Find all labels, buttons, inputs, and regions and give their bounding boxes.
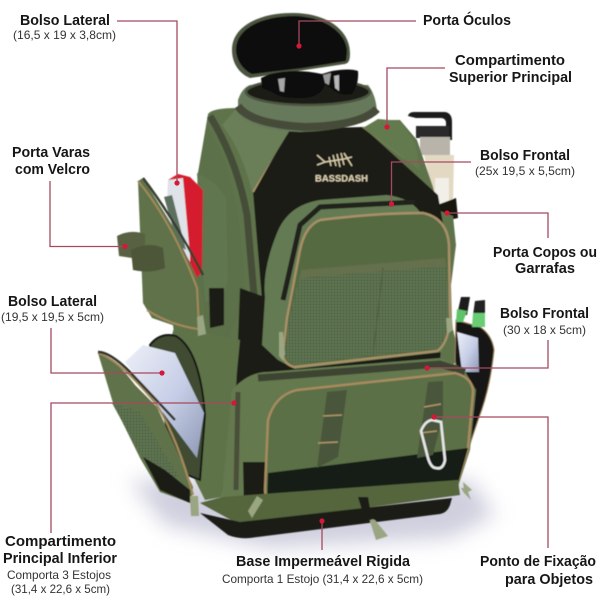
icon: bottle in side holder — [408, 112, 454, 210]
lower pocket piped face — [265, 373, 473, 510]
side shading — [172, 125, 246, 490]
icon: sunglasses case lid — [232, 13, 350, 78]
label: Base Impermeável Rigida: Comporta 1 Estojo (31,4 x 22,6 x 5cm) — [222, 572, 423, 586]
black lower corner — [243, 462, 265, 510]
black gap beneath side pocket — [209, 288, 224, 328]
callout: side pocket lower — [51, 328, 165, 376]
callout: attachment point — [431, 414, 548, 548]
hard black base — [200, 498, 452, 538]
label: Porta Copos — [493, 244, 597, 277]
lower side panel — [173, 325, 240, 500]
label: Ponto de Fixação — [480, 553, 596, 588]
icon: cup holder strap — [437, 198, 458, 222]
icon: rod holder — [117, 232, 165, 272]
callout: front pocket top — [389, 162, 471, 207]
lower pocket outer — [222, 358, 476, 515]
tan piping on centre panel — [253, 127, 405, 192]
flap piping — [138, 181, 199, 329]
label: Base Impermeável Rigida: Base Impermeável Rigida — [236, 553, 411, 570]
label: Bolso Lateral lower — [1, 293, 104, 324]
lower black gap — [236, 288, 282, 392]
ground shadow — [130, 480, 495, 548]
upper pocket piped face — [283, 213, 450, 367]
main body — [172, 108, 460, 495]
upper side pocket body — [197, 173, 228, 302]
upper pocket zipper shadow — [283, 202, 415, 300]
side zipper — [210, 116, 254, 295]
black band — [267, 448, 468, 510]
base green band — [200, 480, 460, 525]
lower flap black base — [143, 457, 190, 503]
upper left flap — [138, 178, 206, 331]
icon: zipper cords — [358, 497, 372, 520]
callout: main lower compartment — [51, 400, 237, 533]
callout: bottle holder — [444, 210, 548, 238]
callout: glasses holder — [296, 21, 416, 49]
label: Porta Varas: com Velcro — [15, 161, 90, 178]
label: Porta Óculos: Porta Óculos — [423, 11, 511, 29]
straps — [317, 381, 443, 468]
label: Bolso Frontal top: Bolso Frontal — [480, 147, 570, 164]
icon: carabiner — [421, 420, 445, 468]
label: Porta Copos: Garrafas — [515, 260, 575, 277]
icon: sunglasses — [261, 70, 358, 98]
logo: BASSDASH — [315, 174, 368, 184]
collar zipper — [238, 106, 377, 127]
backpack illustration — [98, 13, 494, 540]
label: Bolso Lateral lower: (19,5 x 19,5 x 5cm) — [1, 310, 104, 324]
collar opening — [246, 79, 370, 105]
label: Compartimento Superior Principal: Compartimento — [455, 52, 565, 69]
logo — [315, 153, 368, 184]
callout: front pocket lower — [424, 340, 548, 371]
icon: highlighter pens — [456, 297, 485, 327]
lower pocket zipper — [258, 364, 465, 378]
mesh pocket band — [300, 258, 446, 278]
black centre panel — [253, 127, 445, 375]
label: Compartimento Principal Inferior: (31,4 x 22,6 x 5cm) — [11, 582, 110, 596]
callout: side pocket top — [117, 21, 180, 186]
icon: clear tackle box left — [125, 345, 204, 458]
lower flap mesh — [112, 403, 180, 478]
callout: upper main compartment — [384, 68, 445, 130]
upper pocket outer — [262, 195, 451, 369]
label: Compartimento Principal Inferior: Compartimento — [5, 533, 116, 550]
icon: zipper pulls — [190, 315, 472, 540]
label: Compartimento Superior Principal: Superior Principal — [449, 69, 572, 86]
label: Bolso Frontal lower: (30 x 18 x 5cm) — [503, 323, 586, 337]
label: Bolso Frontal top — [475, 147, 575, 178]
label: Compartimento Principal Inferior: Comporta 3 Estojos — [7, 568, 111, 582]
label: Bolso Lateral top: (16,5 x 19 x 3,8cm) — [13, 28, 116, 42]
icon: blue tackle box right — [457, 332, 479, 372]
light shoulder panels — [222, 108, 290, 192]
label: Base Impermeável Rigida — [222, 553, 423, 586]
label: Compartimento Principal Inferior: Principal Inferior — [3, 550, 117, 567]
callout: rod holder — [50, 181, 128, 249]
label: Bolso Frontal lower — [500, 305, 589, 337]
icon: fish skeleton logo — [317, 153, 352, 167]
mesh centre seam — [373, 268, 383, 355]
label: Porta Varas: Porta Varas — [12, 144, 90, 161]
collar — [238, 85, 377, 132]
label: Compartimento Principal Inferior — [3, 533, 117, 596]
label: Compartimento Superior Principal — [449, 52, 572, 86]
label: Bolso Frontal top: (25x 19,5 x 5,5cm) — [475, 164, 575, 178]
lower flap piping — [98, 353, 193, 495]
icon: red tackle box — [164, 174, 203, 278]
lower left flap — [98, 353, 193, 503]
mesh pocket — [285, 263, 449, 364]
label: Bolso Lateral top: Bolso Lateral — [20, 12, 110, 29]
label: Ponto de Fixação: para Objetos — [505, 571, 593, 588]
lower compartment hollow — [150, 335, 205, 480]
label: Bolso Frontal lower: Bolso Frontal — [500, 305, 589, 322]
label: Bolso Lateral top — [13, 12, 116, 42]
right black side flap — [455, 320, 494, 450]
label: Porta Varas — [12, 144, 90, 178]
callout: rigid base — [319, 518, 325, 550]
label: Bolso Lateral lower: Bolso Lateral — [8, 293, 97, 310]
